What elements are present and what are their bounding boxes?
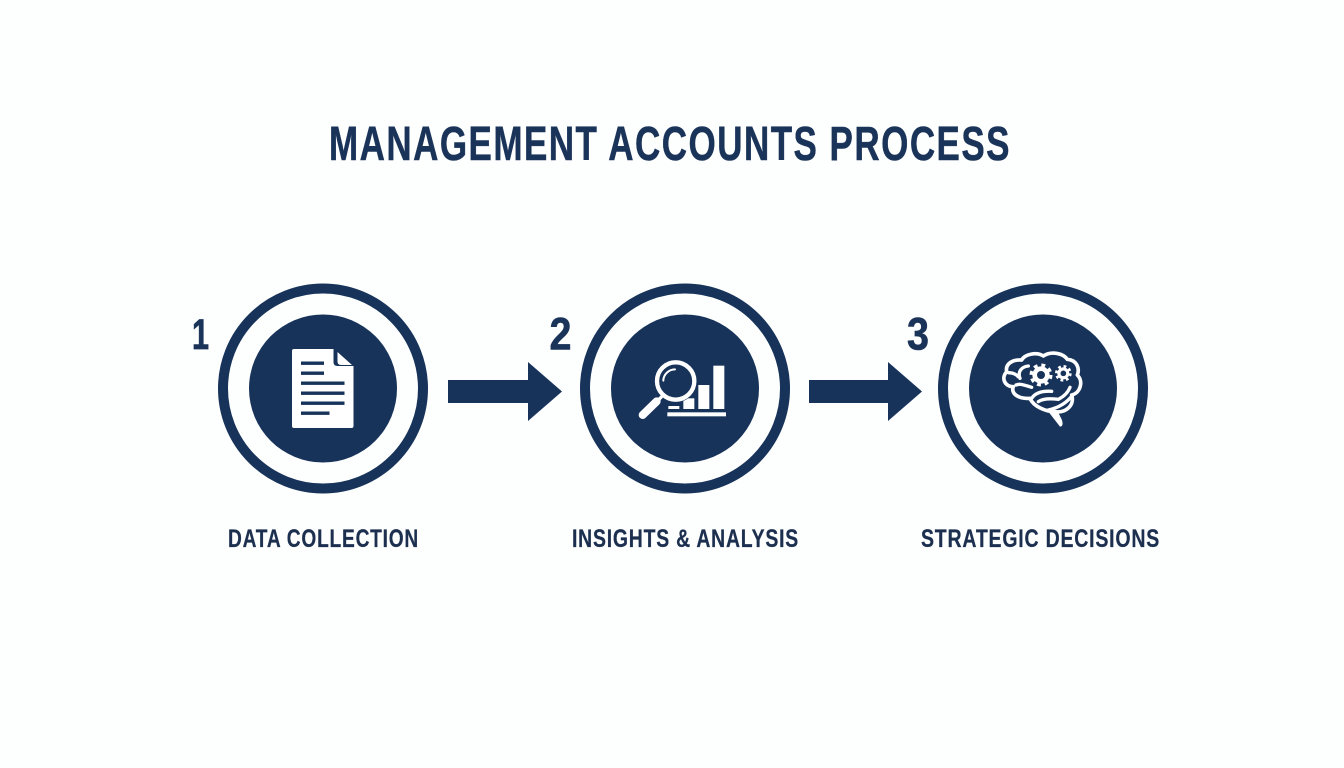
step 1: data collection [192,288,423,553]
step number 2: 2 [550,308,572,360]
step 3 outer ring [943,288,1143,488]
step 1 label: DATA COLLECTION [228,525,419,553]
step 3: strategic decisions [907,288,1160,553]
arrow: step 2 to step 3 [809,362,922,421]
step number 1: 1 [192,311,209,359]
step 3 label: STRATEGIC DECISIONS [921,525,1160,553]
step 2: insights and analysis [550,288,799,553]
step 2 outer ring [585,288,785,488]
step 1 inner disc [249,314,397,462]
title: MANAGEMENT ACCOUNTS PROCESS [329,118,1011,171]
icon: brain with gears [1004,353,1081,427]
large gear [1031,365,1051,385]
step 1 outer ring [223,288,423,488]
step 3 inner disc [969,314,1117,462]
arrow: step 1 to step 2 [448,362,562,421]
icon: document [292,349,354,428]
step 2 label: INSIGHTS & ANALYSIS [572,525,799,553]
icon: magnifier over bar chart [643,360,726,416]
step 2 inner disc [611,314,759,462]
small gear [1056,366,1070,380]
step number 3: 3 [907,308,929,360]
